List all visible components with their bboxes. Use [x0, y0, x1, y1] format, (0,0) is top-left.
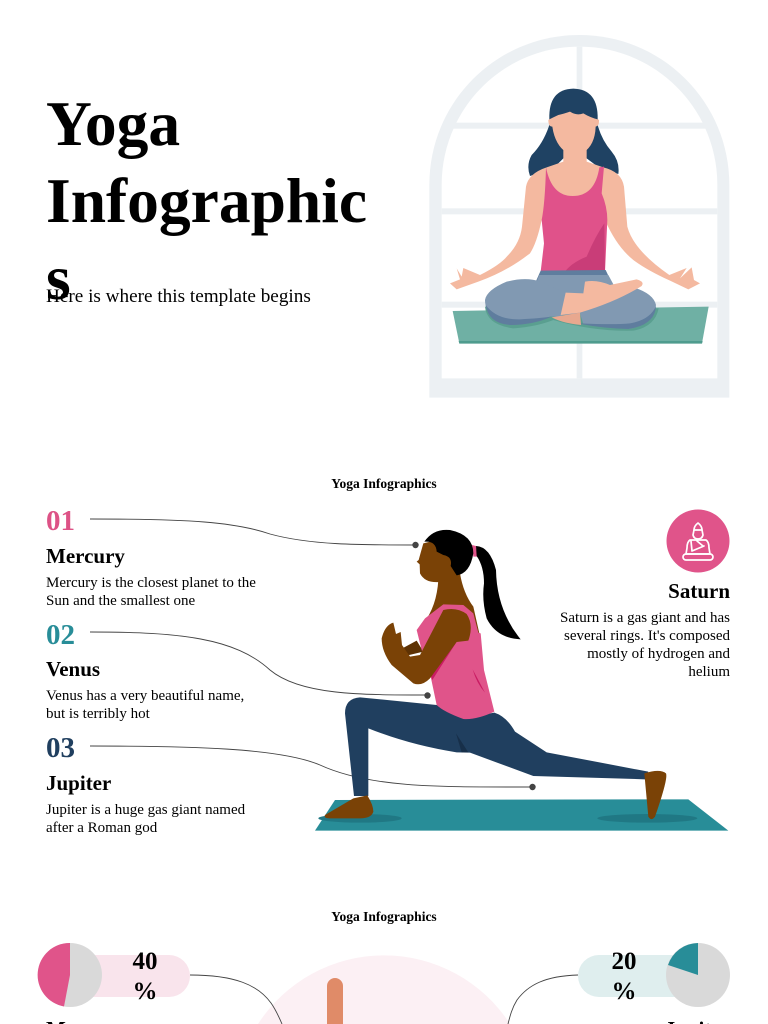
centre pale circle [258, 955, 510, 1024]
item 03 number: 03 [46, 732, 75, 764]
item 03 heading: Jupiter [46, 771, 111, 795]
woman [450, 89, 700, 329]
pill: right [578, 955, 698, 997]
item 02 text: Venus has a very beautiful name, but is terribly hot [46, 688, 244, 722]
hair and ponytail [424, 530, 521, 639]
figure limb [327, 978, 343, 1024]
connector dots [412, 542, 536, 790]
near arm and hand [382, 609, 471, 684]
yoga mat [453, 307, 709, 344]
illustration: woman in lunge pose on mat [315, 530, 728, 831]
pie chart: right [666, 943, 730, 1007]
illustration: meditating woman at window [429, 35, 729, 398]
pie chart: left [38, 943, 102, 1007]
connector lines [90, 519, 532, 787]
ponytail band [472, 545, 477, 557]
item 02 number: 02 [46, 619, 75, 651]
item 01 text: Mercury is the closest planet to the Sun and the smallest one [46, 575, 256, 609]
item 03 text: Jupiter is a huge gas giant named after a Roman god [46, 802, 245, 836]
section heading: percentages: Yoga Infographics [331, 909, 437, 924]
window frame [429, 35, 729, 398]
feet [325, 771, 666, 819]
item 01 number: 01 [46, 505, 75, 537]
icon: pink circle with buddha [666, 510, 730, 572]
connector: left pill to centre [190, 975, 282, 1024]
saturn heading: Saturn [668, 579, 730, 603]
subtitle: Here is where this template begins [46, 286, 311, 307]
item 02 heading: Venus [46, 657, 100, 681]
neck and back skin [423, 573, 479, 643]
far arm [399, 641, 423, 656]
section heading: lunge: Yoga Infographics [331, 476, 437, 491]
pill: left [70, 955, 190, 997]
title: Yoga Infographics [46, 88, 367, 313]
head [417, 538, 467, 582]
right percentage: 20 % [612, 948, 636, 1005]
connector: right pill to centre [508, 975, 578, 1024]
saturn text: Saturn is a gas giant and has several rings. It's composed mostly of hydrogen and helium [560, 610, 730, 680]
teal mat [315, 799, 728, 831]
leggings [345, 697, 648, 796]
item 01 heading: Mercury [46, 544, 125, 568]
left percentage: 40 % [132, 948, 158, 1005]
pink top [417, 604, 494, 719]
